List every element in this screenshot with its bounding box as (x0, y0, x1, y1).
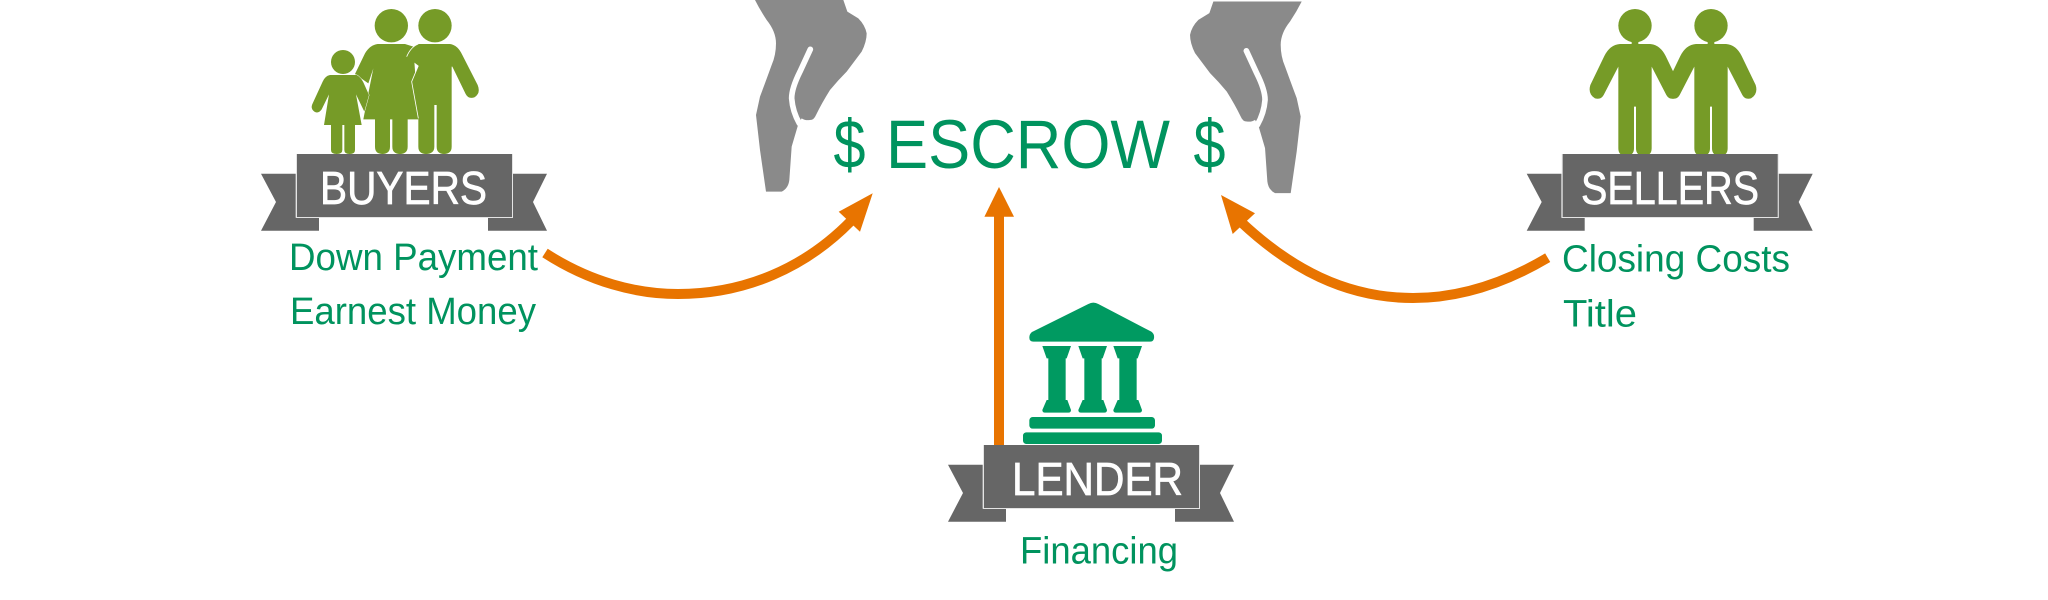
text: sellers contributions: Title (1563, 294, 1637, 336)
banner: sellers (1527, 154, 1813, 231)
icon: sellers pair (1590, 9, 1756, 156)
label: lender: LENDER (1012, 453, 1183, 505)
icon: bank (1023, 303, 1162, 444)
text: sellers contributions: Closing Costs (1562, 239, 1790, 281)
banner: buyers (261, 154, 547, 231)
title: escrow: $ (834, 106, 866, 183)
text: buyers contributions: Earnest Money (290, 291, 536, 333)
icon: left hand (755, 0, 867, 192)
icon: family of buyers (312, 9, 479, 154)
label: buyers: BUYERS (320, 162, 487, 214)
label: sellers: SELLERS (1581, 162, 1759, 214)
text: lender contribution: Financing (1020, 530, 1178, 572)
arrow: buyers to escrow (545, 193, 873, 294)
icon: right hand (1190, 2, 1302, 193)
text: sellers contributions (1562, 239, 1790, 336)
title: escrow: $ (1194, 106, 1226, 183)
text: buyers contributions (289, 237, 538, 333)
arrow: sellers to escrow (1221, 195, 1548, 298)
text: buyers contributions: Down Payment (289, 237, 538, 279)
title: escrow: ESCROW (886, 106, 1170, 183)
arrow: lender to escrow (984, 187, 1014, 446)
banner: lender (948, 445, 1234, 522)
